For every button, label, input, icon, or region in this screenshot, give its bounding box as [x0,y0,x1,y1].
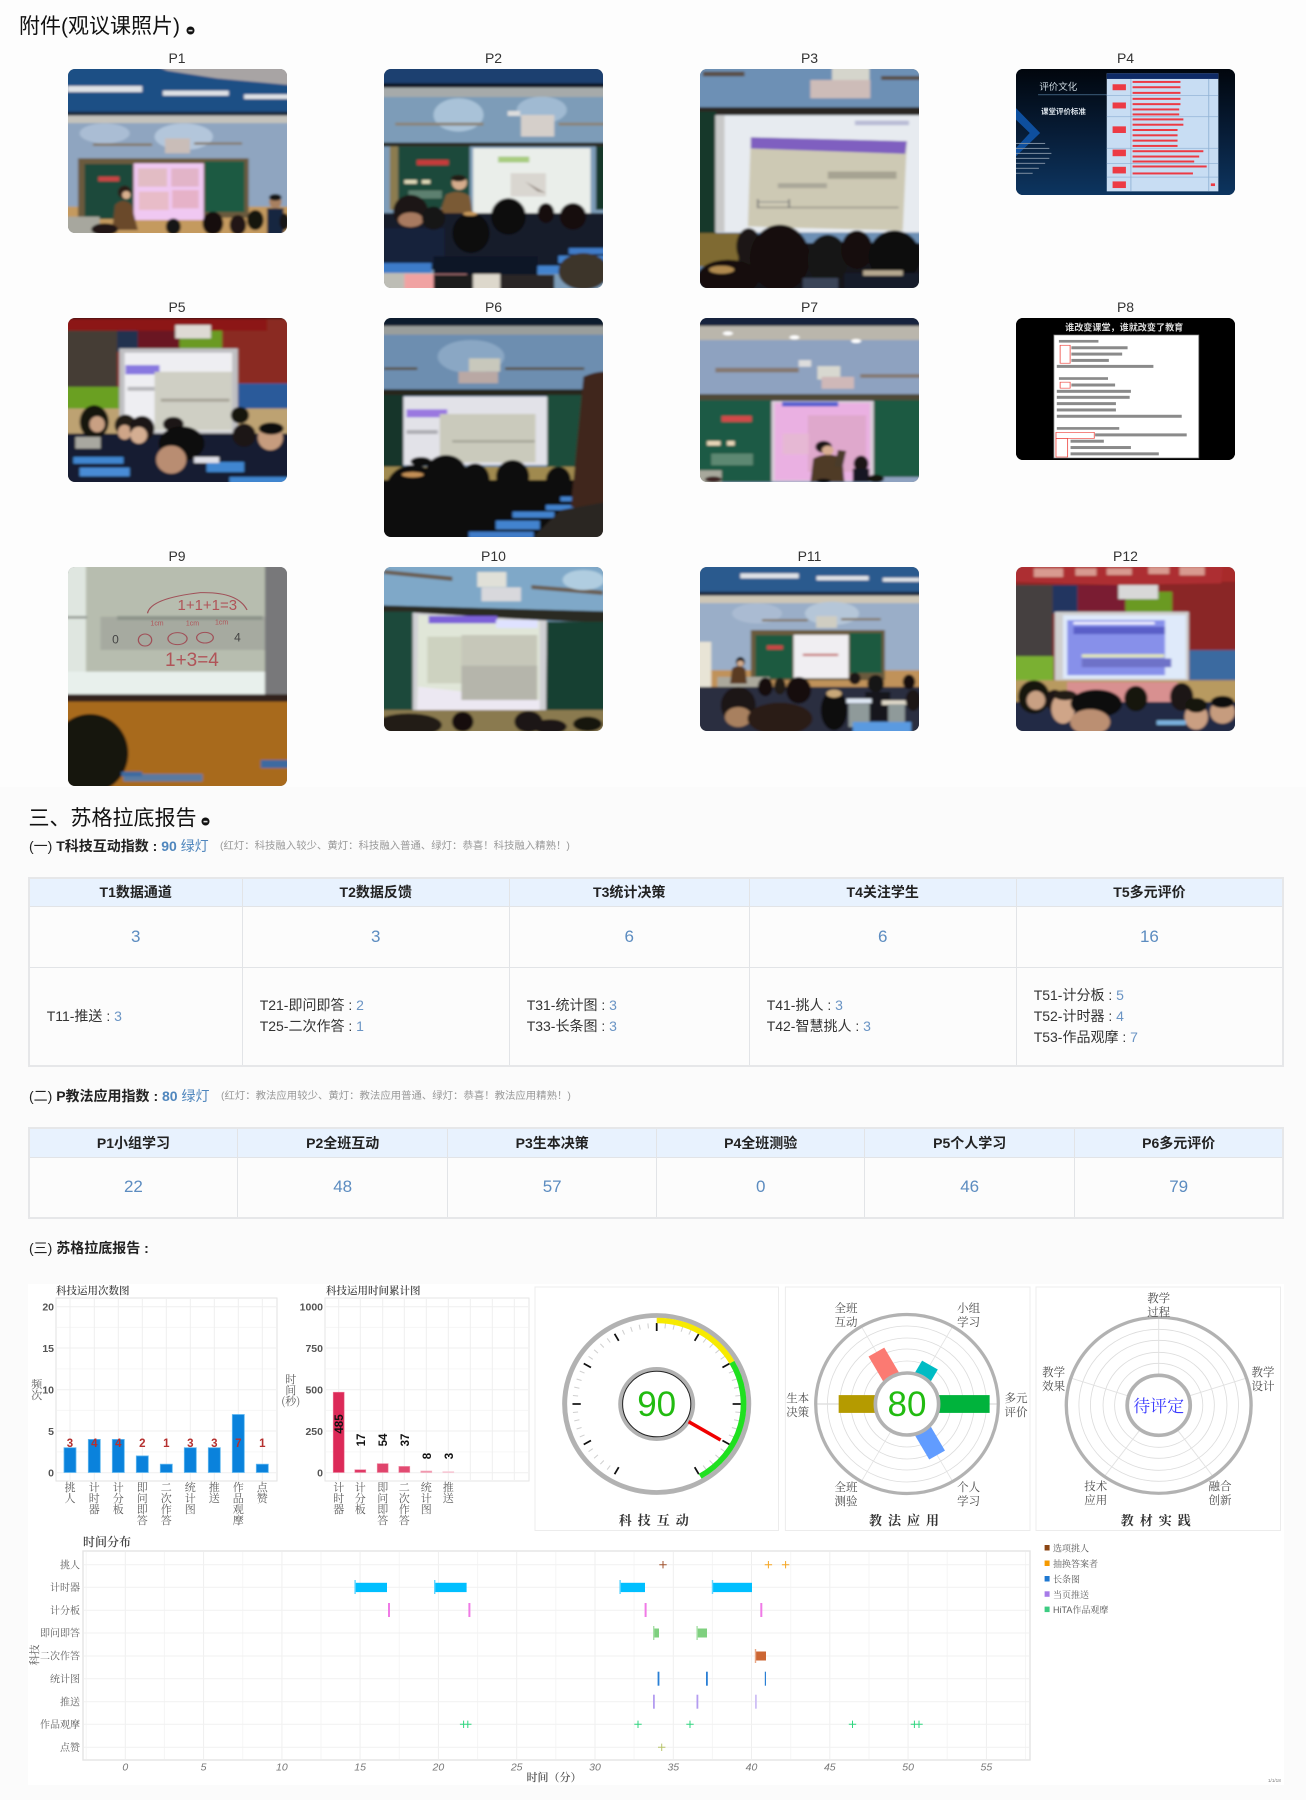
table: P pedagogy indicators: 22 [124,1177,143,1196]
photo card: P9: 1+1+1=3 [177,597,237,614]
table: T technology indicators [28,877,1284,1067]
bar chart: technology usage cumulative time: 8 [422,1452,434,1459]
bar chart: technology usage count: 科技运用次数图 [56,1283,130,1298]
table: T technology indicators: T41-挑人 : 3 [767,997,843,1013]
photo card: P10: P10 [481,548,506,564]
bar chart: technology usage count: 二 [161,1479,172,1495]
table: P pedagogy indicators: 48 [333,1177,352,1196]
photo card: P4 [1016,50,1235,195]
bar chart: technology usage count: 送 [209,1490,220,1506]
panel: teaching material practice polar chart: 效果 [1042,1378,1066,1394]
bar chart: technology usage count [31,1283,277,1528]
bar chart: technology usage cumulative time: 答 [377,1512,388,1528]
photo card: P5: P5 [168,299,186,315]
table: T technology indicators: T3统计决策 [593,884,665,900]
bar chart: technology usage count: 计 [113,1479,124,1495]
bar chart: technology usage count: 2 [139,1438,146,1450]
bar chart: technology usage count: 计 [185,1490,196,1506]
panel: pedagogy application polar chart: 小组 [957,1300,981,1316]
y axis labels: 二次作答 [40,1648,80,1663]
panel: technology interaction gauge: 科技互动 [619,1510,695,1529]
panel: pedagogy application polar chart: 学习 [957,1493,980,1509]
panel: teaching material practice polar chart: 待评定 [1133,1392,1184,1417]
bar chart: technology usage cumulative time: 科技运用时间累计图 [326,1283,420,1298]
bar chart: technology usage count: 观 [233,1501,244,1517]
photo card: P4: P4 [1117,50,1134,66]
photo card: P7 [700,299,919,482]
second answer interval [755,1649,766,1663]
bar chart: technology usage count: 作 [233,1479,244,1495]
table: T technology indicators: 6 [624,926,634,946]
timer intervals [354,1580,752,1594]
heading: Socratic report: 三、苏格拉底报告 [28,807,196,830]
panel: teaching material practice polar chart: 融合 [1208,1478,1232,1494]
table: T technology indicators: T2数据反馈 [340,884,412,900]
bar chart: technology usage cumulative time: 器 [333,1501,344,1517]
timeline chart: time distribution: 时间（分） [526,1769,582,1785]
bar chart: technology usage cumulative time: 3 [444,1453,456,1459]
bar chart: technology usage count: 频 [31,1376,43,1392]
subheading: Socratic report charts: (三) 苏格拉底报告 : [29,1240,149,1256]
legend [1045,1542,1108,1615]
timeline chart: time distribution [27,1533,1030,1785]
table: T technology indicators: T42-智慧挑人 : 3 [767,1018,871,1034]
photo card: P4: 评价文化 [1039,81,1078,93]
panel: teaching material practice polar chart [1036,1287,1280,1530]
bar chart: technology usage count: 器 [89,1501,100,1517]
panel: teaching material practice polar chart: 过程 [1147,1304,1171,1320]
table: T technology indicators: T53-作品观摩 : 7 [1034,1029,1138,1045]
bar chart: technology usage count: 1 [163,1438,170,1450]
table: T technology indicators: 6 [878,926,887,946]
photo card: P12 [1016,548,1235,731]
bar chart: technology usage cumulative time: 计 [333,1479,344,1495]
bar chart: technology usage cumulative time: 即 [377,1479,388,1495]
panel: teaching material practice polar chart: 教学 [1147,1290,1171,1306]
bar chart: technology usage count: 次 [161,1490,172,1506]
bar chart: technology usage cumulative time: 间 [285,1382,296,1398]
panel: pedagogy application polar chart: 教法应用 [869,1510,945,1529]
bar chart: technology usage count: 10 [42,1384,54,1396]
panel: pedagogy application polar chart: 测验 [834,1493,858,1509]
bar chart: technology usage count: 问 [137,1490,148,1506]
legend: 抽换答案者 [1053,1557,1098,1570]
bar chart: technology usage count: 板 [113,1501,124,1517]
subheading: P index: (红灯：教法应用较少、黄灯：教法应用普通、绿灯：恭喜！教法应用精熟！) [221,1091,571,1102]
bar chart: technology usage count: 即 [137,1479,148,1495]
table: P pedagogy indicators: P4全班测验 [724,1135,797,1151]
bar chart: technology usage count: 1 [259,1438,266,1450]
y axis labels: 点赞 [60,1739,81,1754]
table: P pedagogy indicators: 0 [756,1177,765,1196]
panel: teaching material practice polar chart: 创新 [1208,1492,1232,1508]
bar chart: technology usage count: 即 [137,1501,148,1517]
photo card: P11 [700,548,919,731]
bar chart: technology usage count: 摩 [233,1512,244,1528]
bar chart: technology usage cumulative time: 时 [285,1371,296,1387]
panel: pedagogy application polar chart: 生本 [786,1390,810,1406]
bar chart: technology usage count: 作 [161,1501,172,1517]
x axis labels: 40 [746,1762,757,1774]
y axis labels: 作品观摩 [40,1716,80,1731]
x axis labels: 15 [354,1762,366,1774]
table: T technology indicators: T4关注学生 [847,884,919,900]
y axis labels: 统计图 [50,1670,80,1685]
table: T technology indicators: T52-计时器 : 4 [1034,1008,1124,1024]
panel: pedagogy application polar chart: 80 [888,1385,926,1424]
bar chart: technology usage count: 赞 [257,1490,269,1506]
x axis labels: 0 [122,1762,128,1774]
student pick marks [659,1561,789,1568]
bar chart: technology usage cumulative time: 送 [443,1490,454,1506]
bar chart: technology usage count: 0 [48,1468,54,1480]
table: P pedagogy indicators: 57 [543,1177,562,1196]
panel: teaching material practice polar chart: 应用 [1084,1492,1107,1508]
bar chart: technology usage count: 3 [67,1438,73,1450]
photo card: P8: P8 [1117,299,1134,315]
y axis labels [40,1556,81,1754]
bar chart: technology usage cumulative time: 17 [356,1434,368,1446]
x axis labels: 20 [432,1762,444,1774]
bar chart: technology usage cumulative time: 37 [400,1434,412,1446]
photo card: P10 [384,548,603,731]
subheading: P index: (二) P教法应用指数 : 80 绿灯 [29,1088,209,1104]
heading: attachment photos: 附件(观议课照片) [19,15,180,38]
table: T technology indicators: T5多元评价 [1113,884,1186,900]
bar chart: technology usage cumulative time: 作 [399,1501,410,1517]
bar chart: technology usage count: 推 [209,1479,220,1495]
subheading: P index [29,1088,571,1104]
bar chart: technology usage cumulative time: 500 [305,1384,323,1396]
photo card: P4: 课堂评价标准 [1041,106,1086,117]
x axis labels: 55 [981,1762,992,1774]
bar chart: technology usage cumulative time: 即 [377,1501,388,1517]
bar chart: technology usage cumulative time: 板 [355,1501,366,1517]
bar chart: technology usage cumulative time: 485 [334,1414,346,1434]
bar chart: technology usage count: 3 [187,1438,194,1450]
panel: technology interaction gauge: 90 [637,1385,676,1424]
bar chart: technology usage cumulative time: 时 [333,1490,344,1506]
y axis labels: 计分板 [50,1602,80,1617]
panel: technology interaction gauge [535,1287,778,1530]
bar chart: technology usage cumulative time: 二 [399,1479,410,1495]
legend: 长条图 [1053,1572,1080,1586]
y axis labels: 即问即答 [40,1625,80,1640]
bar chart: technology usage cumulative time: 分 [355,1490,366,1506]
timeline chart: time distribution: 科技 [27,1644,42,1666]
bar chart: technology usage count: 次 [31,1387,42,1403]
bar chart: technology usage cumulative time: 250 [305,1426,323,1438]
photo card: P6: P6 [485,299,502,315]
photo card: P9 [68,548,287,786]
bar chart: technology usage cumulative time: 750 [305,1343,323,1355]
bar chart: technology usage count: 点 [257,1479,269,1495]
table: P pedagogy indicators: P3生本决策 [516,1135,589,1151]
table: T technology indicators: T1数据通道 [100,884,172,900]
bar chart: technology usage cumulative time: 计 [355,1479,366,1495]
table: T technology indicators: 3 [371,926,380,946]
photo card: P9: P9 [168,548,186,564]
panel: pedagogy application polar chart: 学习 [957,1314,980,1330]
panel: pedagogy application polar chart: 多元 [1004,1390,1028,1406]
subheading: T index [29,838,570,854]
like mark [658,1744,665,1751]
panel: teaching material practice polar chart: 教学 [1042,1364,1066,1380]
table: P pedagogy indicators: 79 [1169,1177,1188,1196]
push marks [653,1695,757,1709]
panel: teaching material practice polar chart: 技术 [1084,1478,1108,1494]
x axis labels [122,1762,992,1774]
panel: pedagogy application polar chart: 全班 [834,1300,858,1316]
bar chart: technology usage cumulative time: 1000 [300,1302,323,1314]
photo card: P7: P7 [801,299,818,315]
table: P pedagogy indicators: P5个人学习 [933,1135,1006,1151]
bar chart: technology usage count: 4 [115,1438,122,1450]
y axis labels: 挑人 [60,1556,80,1572]
bar chart: technology usage cumulative time [281,1283,529,1528]
panel: pedagogy application polar chart: 评价 [1004,1404,1028,1420]
x axis labels: 25 [510,1762,523,1774]
photo card: P9: 1cm [214,620,228,627]
x axis labels: 35 [667,1762,679,1774]
panel: teaching material practice polar chart: 教学 [1252,1364,1275,1380]
quick answer intervals [653,1626,707,1640]
photo card: P9: 1cm [150,620,163,627]
photo card: P9: 1+3=4 [165,650,218,671]
bar chart: technology usage cumulative time: 统 [421,1479,432,1495]
bar chart: technology usage count: 4 [91,1438,98,1450]
table: T technology indicators: T25-二次作答 : 1 [260,1018,364,1034]
panel: pedagogy application polar chart [785,1287,1030,1530]
photo card: P3 [700,50,919,288]
photo card: P2: P2 [485,50,502,66]
bar chart: technology usage cumulative time: 答 [399,1512,410,1528]
legend: 选项挑人 [1053,1542,1089,1554]
table: P pedagogy indicators: P1小组学习 [97,1135,170,1151]
table: T technology indicators: T31-统计图 : 3 [527,997,617,1013]
bar chart: technology usage count: 答 [161,1512,172,1528]
chart container background [28,1284,1284,1785]
panel: pedagogy application polar chart: 决策 [786,1404,810,1420]
bar chart: technology usage count: 人 [64,1490,76,1506]
bar chart: technology usage count: 时 [89,1490,100,1506]
bar chart: technology usage count: 分 [113,1490,124,1506]
bar chart: technology usage count: 15 [42,1343,54,1355]
x axis labels: 10 [276,1762,288,1774]
bar chart: technology usage cumulative time: (秒) [281,1393,300,1409]
table: T technology indicators: T33-长条图 : 3 [527,1018,617,1034]
subheading: T index: (红灯：科技融入较少、黄灯：科技融入普通、绿灯：恭喜！科技融入精熟！) [220,841,570,852]
bar chart: technology usage cumulative time: 问 [377,1490,388,1506]
panel: teaching material practice polar chart: 设计 [1252,1378,1275,1394]
bar chart: technology usage count: 图 [185,1501,196,1517]
photo card: P1 [68,50,287,233]
table: P pedagogy indicators: P6多元评价 [1142,1135,1215,1151]
table: P pedagogy indicators [28,1127,1284,1219]
bar chart: technology usage count: 挑 [64,1479,76,1495]
x axis labels: 45 [824,1762,836,1774]
photo card: P9: 0 [112,632,119,646]
bar chart: technology usage count: 20 [42,1302,54,1314]
photo card: P9: 1cm [185,620,199,627]
bar chart: technology usage count: 答 [137,1512,148,1528]
bar chart: technology usage count: 品 [233,1490,244,1506]
photo card: P12: P12 [1113,548,1138,564]
table: T technology indicators: T51-计分板 : 5 [1034,987,1124,1003]
legend: HiTA作品观摩 [1053,1604,1108,1615]
timeline chart: time distribution: 时间分布 [83,1533,131,1550]
page number: 1/1/18 [1268,1778,1281,1783]
x axis labels: 50 [902,1762,914,1774]
bar chart: technology usage cumulative time: 计 [421,1490,432,1506]
bar chart: technology usage count: 3 [211,1438,218,1450]
work review marks [460,1721,923,1728]
table: T technology indicators: 3 [131,926,140,946]
photo card: P6 [384,299,603,537]
panel: pedagogy application polar chart: 互动 [834,1314,858,1330]
panel: pedagogy application polar chart: 个人 [957,1479,981,1495]
photo card: P5 [68,299,287,482]
photo card: P1: P1 [168,50,186,66]
legend: 当页推送 [1053,1588,1089,1601]
x axis labels: 5 [201,1762,207,1774]
photo card: P9: 4 [234,631,241,645]
bar chart: technology usage cumulative time: 图 [421,1501,432,1517]
table: T technology indicators: 16 [1140,926,1159,946]
y axis labels: 计时器 [50,1579,80,1594]
subheading: T index: (一) T科技互动指数 : 90 绿灯 [29,838,209,854]
table: P pedagogy indicators: P2全班互动 [306,1135,379,1151]
scoreboard marks [388,1603,762,1617]
bar chart: technology usage cumulative time: 54 [378,1433,390,1446]
bar chart: technology usage count: 7 [235,1438,242,1450]
table: T technology indicators: T21-即问即答 : 2 [260,997,364,1013]
photo card: P11: P11 [798,548,821,564]
statistics chart marks [658,1672,766,1686]
photo card: P2 [384,50,603,288]
bar chart: technology usage cumulative time: 推 [443,1479,454,1495]
section background: attachment photos [0,0,1306,787]
bar chart: technology usage count: 计 [89,1479,100,1495]
table: T technology indicators: T11-推送 : 3 [47,1008,122,1024]
table: P pedagogy indicators: 46 [960,1177,979,1196]
bar chart: technology usage cumulative time: 次 [399,1490,410,1506]
panel: teaching material practice polar chart: 教材实践 [1121,1510,1197,1529]
panel: pedagogy application polar chart: 全班 [834,1479,858,1495]
x axis labels: 30 [589,1762,601,1774]
photo card: P3: P3 [801,50,818,66]
bar chart: technology usage count: 统 [185,1479,196,1495]
bar chart: technology usage count: 5 [48,1426,54,1438]
photo card: P8: 谁改变课堂，谁就改变了教育 [1065,320,1183,334]
y axis labels: 推送 [60,1693,80,1708]
bar chart: technology usage cumulative time: 0 [317,1468,323,1480]
photo card: P8 [1016,299,1235,460]
